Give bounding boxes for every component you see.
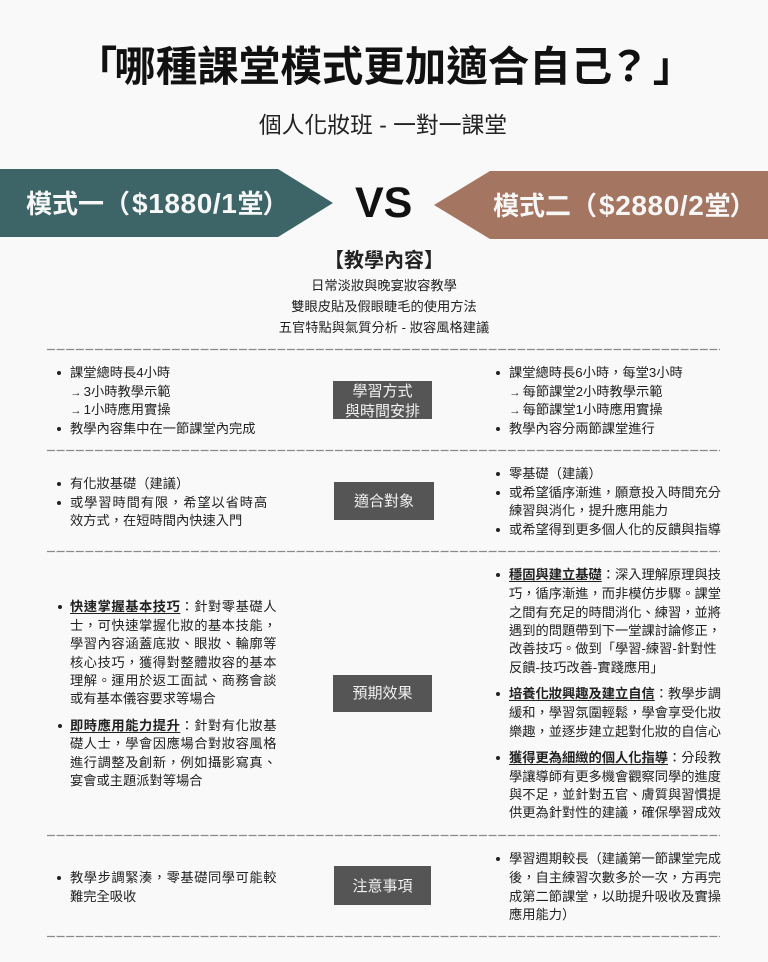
row 3 right: mode two outcomes: 獲得更為細緻的個人化指導：分段教	[509, 750, 721, 765]
row 3 left: mode one outcomes: 或有基本儀容要求等場合	[70, 691, 216, 706]
row 4 right: mode two notes: 成第二節課堂，以助提升吸收及實操	[509, 889, 721, 904]
row 3 left: mode one outcomes	[58, 599, 277, 788]
row 3 right: mode two outcomes: 緩和，學習氛圍輕鬆，學會享受化妝	[509, 705, 721, 720]
mode two banner: 模式二（$2880/2堂）	[493, 190, 755, 221]
row 3 left: mode one outcomes: 理解。運用於返工面試、商務會談	[70, 673, 277, 688]
teaching content list: 日常淡妝與晚宴妝容教學	[311, 278, 457, 293]
row 1 left: mode one schedule	[57, 365, 256, 436]
row 4 left: mode one notes: 教學步調緊湊，零基礎同學可能較	[70, 870, 277, 885]
teaching content block	[279, 250, 489, 335]
row 3 left: mode one outcomes: 宴會或主題派對等場合	[70, 773, 203, 788]
row 3 left: mode one outcomes: 即時應用能力提升：針對有化妝基	[70, 718, 277, 733]
row 3 right: mode two outcomes: 樂趣，並逐步建立起對化妝的自信心	[509, 724, 721, 739]
row 1 right: mode two schedule	[496, 365, 683, 436]
row 2 badge: audience: 適合對象	[354, 493, 414, 510]
teaching content list	[279, 278, 489, 335]
row 2 right: mode two audience	[496, 466, 721, 537]
row 3 right: mode two outcomes: 反饋-技巧改善-實踐應用」	[509, 660, 664, 675]
row 3 right: mode two outcomes: 巧，循序漸進，而非模仿步驟。課堂	[509, 586, 721, 601]
subtitle: 個人化妝班 - 一對一課堂	[259, 112, 507, 138]
row 2 right: mode two audience: 或希望得到更多個人化的反饋與指導	[509, 522, 721, 537]
row 1 right: mode two schedule: 課堂總時長6小時，每堂3小時	[509, 365, 683, 380]
row 3 right: mode two outcomes: 供更為針對性的建議，確保學習成效	[509, 805, 721, 820]
row 3 right: mode two outcomes	[496, 567, 721, 820]
row 3 right: mode two outcomes: 學讓導師有更多機會觀察同學的進度	[509, 769, 721, 784]
row 2 right: mode two audience: 練習與消化，提升應用能力	[509, 503, 668, 518]
teaching content list: 五官特點與氣質分析 - 妝容風格建議	[279, 320, 489, 335]
row 2 left: mode one audience	[57, 476, 268, 528]
teaching content list: 雙眼皮貼及假眼睫毛的使用方法	[291, 299, 477, 314]
row 1 badge: schedule: 與時間安排	[345, 403, 420, 420]
row 4 right: mode two notes	[496, 851, 721, 922]
row 3 right: mode two outcomes: 遇到的問題帶到下一堂課討論修正，	[509, 623, 721, 638]
row 4 right: mode two notes: 後，自主練習次數多於一次，方再完	[509, 870, 721, 885]
row 3 left: mode one outcomes: 核心技巧，獲得對整體妝容的基本	[70, 655, 277, 670]
row 1 left: mode one schedule: → 1小時應用實操	[70, 402, 171, 417]
row 4 right: mode two notes: 學習週期較長（建議第一節課堂完成	[509, 851, 721, 866]
row 2 badge: audience	[334, 482, 434, 520]
row 3 left: mode one outcomes: 快速掌握基本技巧：針對零基礎人	[70, 599, 277, 614]
row 1 right: mode two schedule: → 每節課堂1小時應用實操	[509, 402, 663, 417]
row 2 left: mode one audience: 或學習時間有限，希望以省時高	[70, 495, 268, 510]
row 1 badge: schedule	[333, 381, 432, 419]
row 3 right: mode two outcomes: 與不足，並針對五官、膚質與習慣提	[509, 787, 721, 802]
row 1 left: mode one schedule: 課堂總時長4小時	[70, 365, 170, 380]
row 1 badge: schedule: 學習方式	[352, 383, 412, 400]
row 4 left: mode one notes: 難完全吸收	[70, 889, 136, 904]
row 4 right: mode two notes: 應用能力）	[509, 907, 575, 922]
row 3 left: mode one outcomes: 士，可快速掌握化妝的基本技能，	[70, 618, 277, 633]
row 2 left: mode one audience: 效方式，在短時間內快速入門	[70, 513, 242, 528]
title: 「哪種課堂模式更加適合自己？」	[76, 43, 694, 90]
VS label: VS	[355, 179, 412, 227]
row 4 badge: notes: 注意事項	[352, 878, 412, 895]
row 3 left: mode one outcomes: 礎人士，學會因應場合對妝容風格	[70, 736, 277, 751]
row 3 right: mode two outcomes: 培養化妝興趣及建立自信：教學步調	[509, 686, 721, 701]
row 3 right: mode two outcomes: 穩固與建立基礎：深入理解原理與技	[509, 567, 721, 582]
mode two banner	[434, 171, 768, 239]
row 1 right: mode two schedule: 教學內容分兩節課堂進行	[509, 421, 655, 436]
row 2 right: mode two audience: 或希望循序漸進，願意投入時間充分	[509, 485, 721, 500]
row 2 right: mode two audience: 零基礎（建議）	[509, 466, 602, 481]
teaching content heading: 【教學內容】	[324, 250, 444, 272]
row 3 right: mode two outcomes: 之間有充足的時間消化、練習，並將	[509, 605, 721, 620]
row 1 right: mode two schedule: → 每節課堂2小時教學示範	[509, 384, 663, 399]
row 3 left: mode one outcomes: 進行調整及創新，例如攝影寫真、	[70, 755, 277, 770]
row 4 left: mode one notes	[57, 870, 277, 904]
mode one banner	[0, 169, 333, 237]
row 3 right: mode two outcomes: 改善技巧。做到「學習-練習-針對性	[509, 641, 717, 656]
mode one banner: 模式一（$1880/1堂）	[26, 188, 288, 219]
row 4 badge: notes	[334, 866, 431, 905]
row 1 left: mode one schedule: 教學內容集中在一節課堂內完成	[70, 421, 256, 436]
row 3 badge: outcomes: 預期效果	[352, 685, 412, 702]
row 2 left: mode one audience: 有化妝基礎（建議）	[70, 476, 189, 491]
row 1 left: mode one schedule: → 3小時教學示範	[70, 384, 171, 399]
row 3 left: mode one outcomes: 學習內容涵蓋底妝、眼妝、輪廓等	[70, 636, 277, 651]
row 3 badge: outcomes	[333, 675, 432, 712]
